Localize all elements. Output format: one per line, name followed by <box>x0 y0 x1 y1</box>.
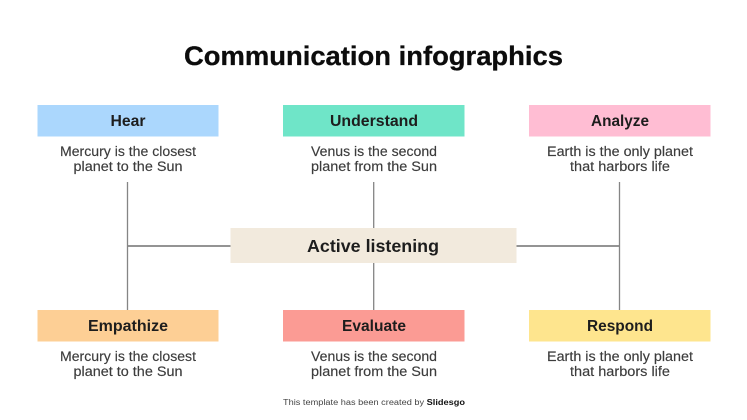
panel: Analyze: Earth is the only planet <box>547 144 693 159</box>
connector lines <box>128 182 620 310</box>
panel: Analyze <box>529 105 710 174</box>
panel: Hear: Mercury is the closest <box>60 144 196 159</box>
panel: Understand: Understand <box>330 113 418 130</box>
panel: Empathize: Mercury is the closest <box>60 349 196 364</box>
panel: Evaluate: planet from the Sun <box>311 364 437 379</box>
panel: Understand <box>283 105 464 174</box>
panel: Active listening: Active listening <box>307 236 439 256</box>
panel: Empathize: planet to the Sun <box>74 364 182 379</box>
panel: Empathize: Empathize <box>88 318 168 335</box>
panel: Respond: Respond <box>587 318 653 335</box>
panel: Empathize <box>38 310 218 379</box>
panel: Hear <box>38 105 218 174</box>
panel: Analyze: that harbors life <box>570 159 670 174</box>
panel: Evaluate: Venus is the second <box>311 349 437 364</box>
panel: Understand: Venus is the second <box>311 144 437 159</box>
panel: Analyze: Analyze <box>591 113 649 130</box>
panel: Hear: planet to the Sun <box>74 159 182 174</box>
panel: Respond: Earth is the only planet <box>547 349 693 364</box>
panel: Respond <box>529 310 710 379</box>
panel: Understand: planet from the Sun <box>311 159 437 174</box>
panel: Active listening <box>230 228 516 263</box>
footer credit: This template has been created by Slidesgo <box>283 398 465 407</box>
title: Communication infographics <box>184 41 563 71</box>
panel: Evaluate: Evaluate <box>342 318 406 335</box>
panel: Hear: Hear <box>110 113 146 130</box>
panel: Respond: that harbors life <box>570 364 670 379</box>
panel: Evaluate <box>283 310 464 379</box>
